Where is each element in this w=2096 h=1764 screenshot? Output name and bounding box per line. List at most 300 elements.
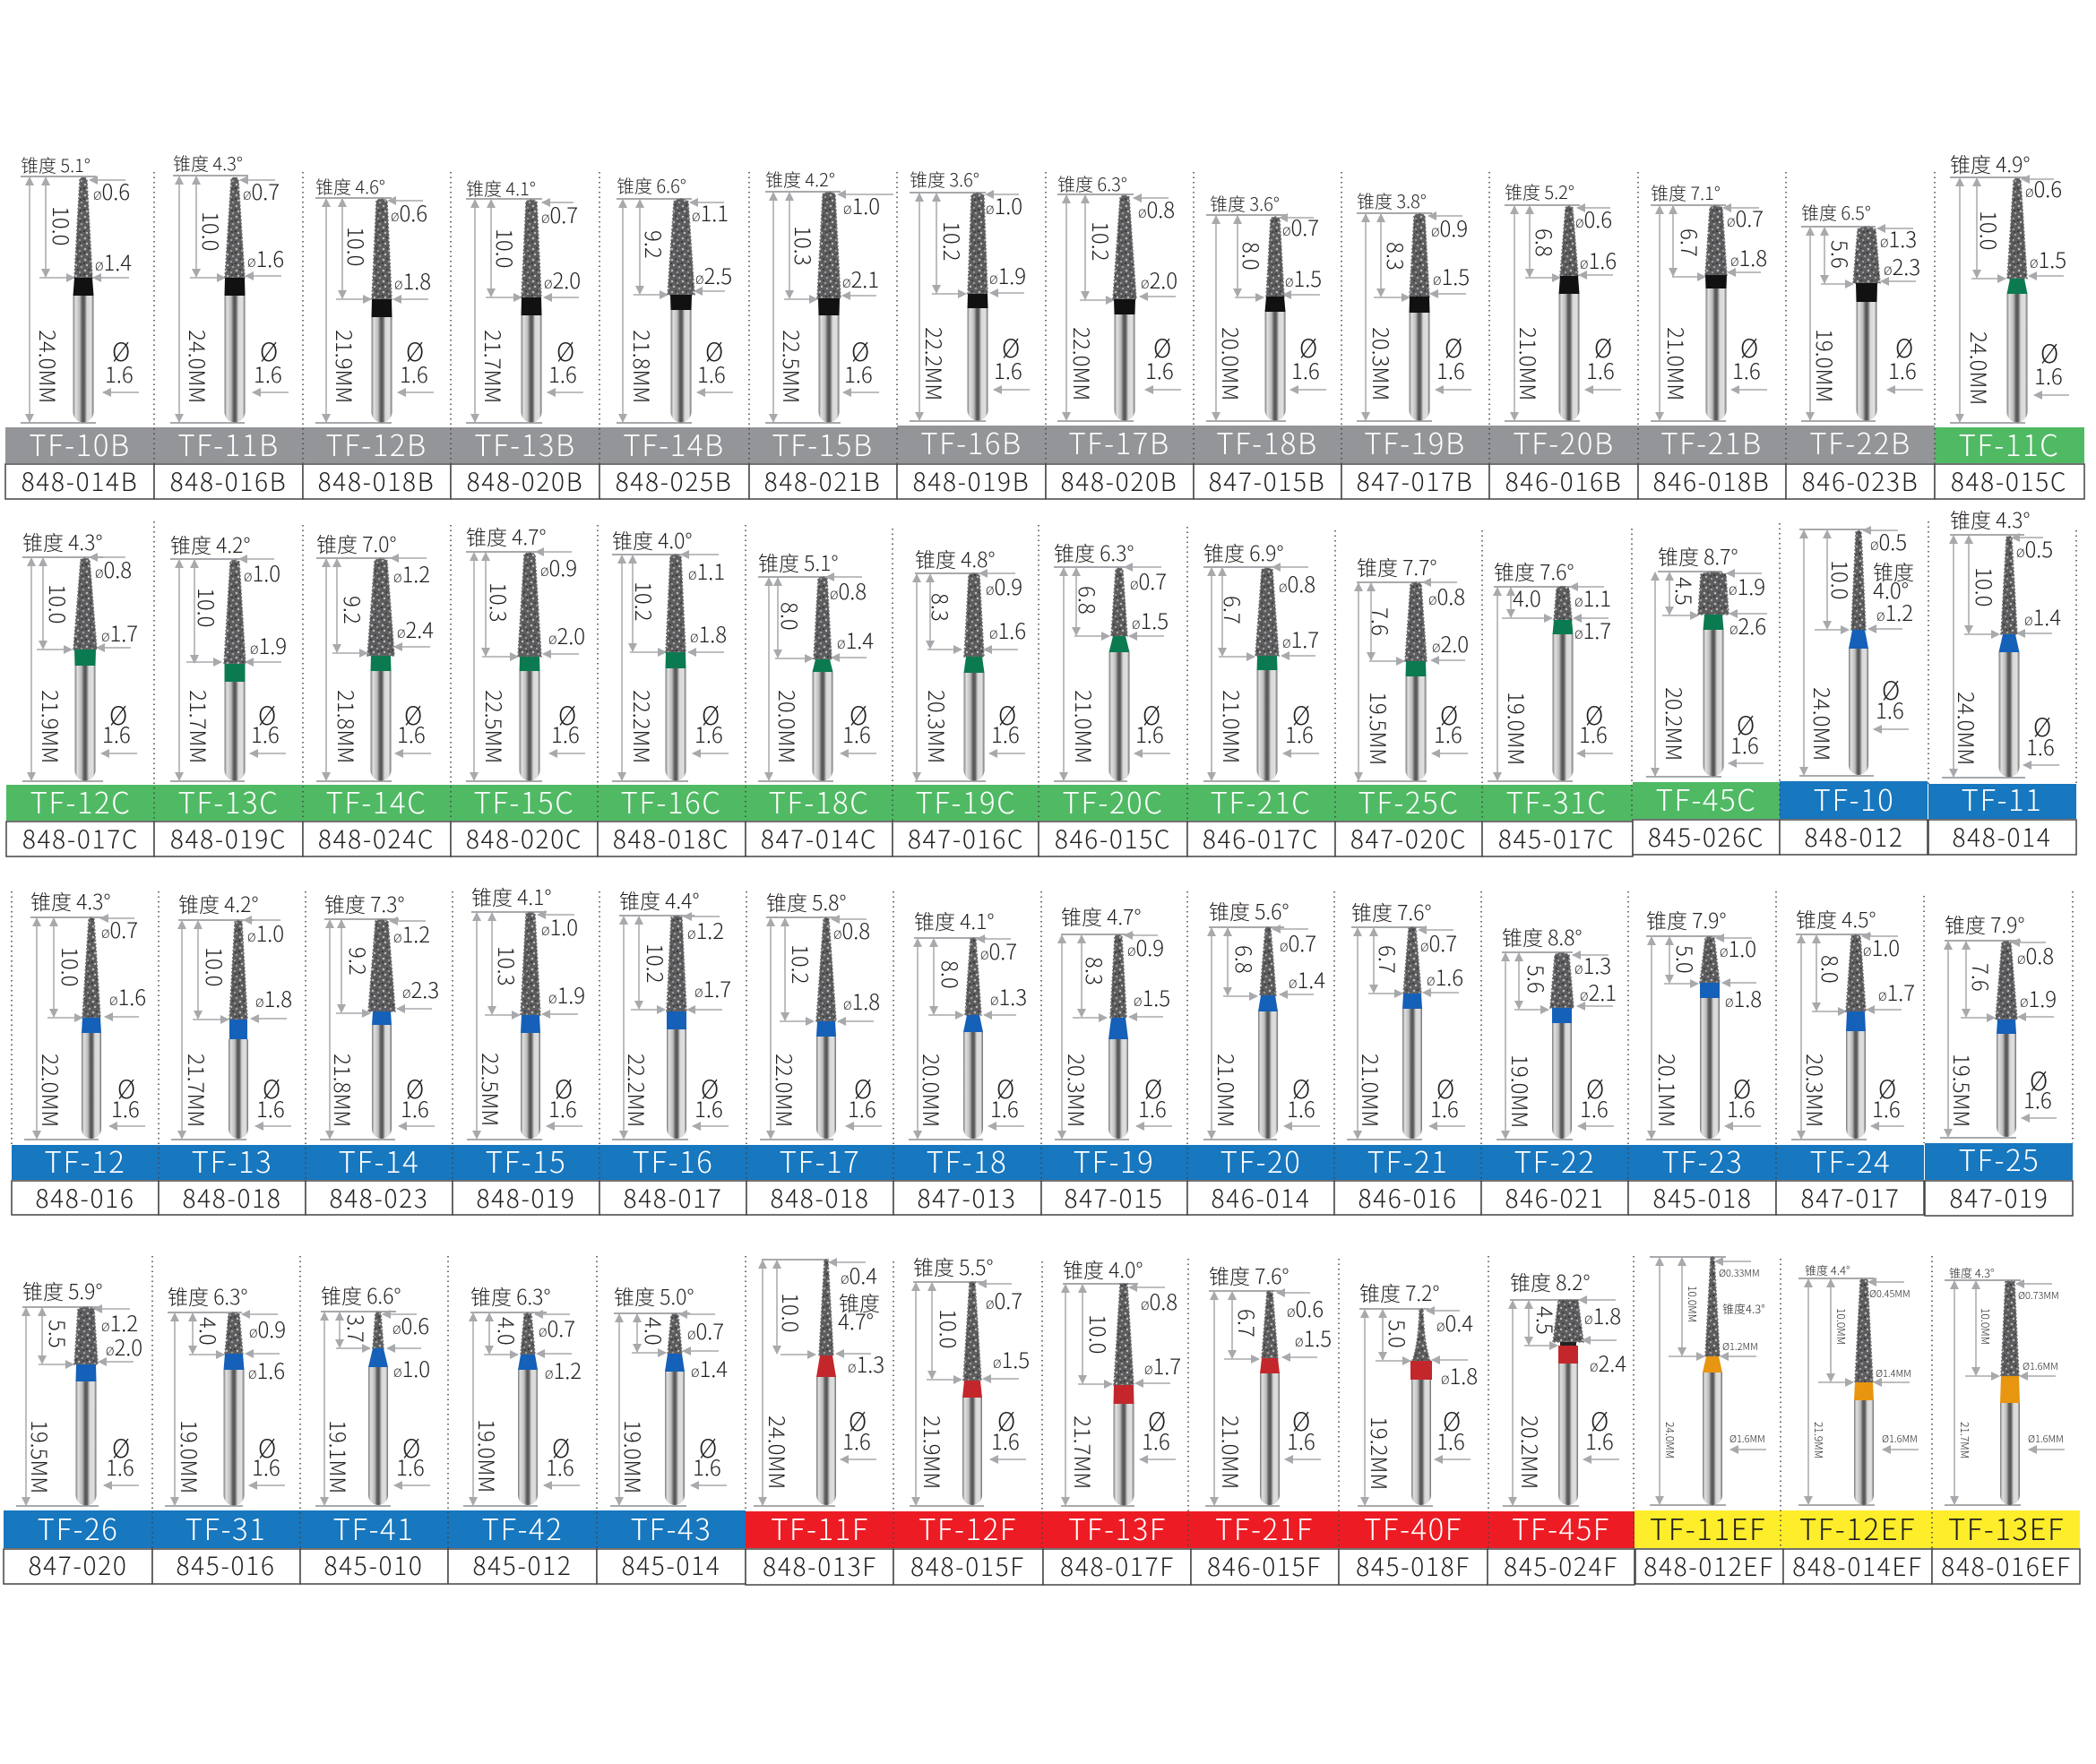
code 845-016: 845-016 (176, 1547, 276, 1583)
bur TF-22B: 1.6 (1888, 354, 1917, 385)
label TF-17B: TF-17B (1068, 420, 1170, 463)
bur TF-21: Ø1.6 (1427, 960, 1463, 992)
bur TF-45F: Ø (1591, 1403, 1609, 1439)
bur TF-11B (170, 150, 289, 423)
label TF-45F (1488, 1506, 1635, 1549)
code 848-018B: 848-018B (318, 463, 435, 499)
bur TF-18: 锥度 4.1° (914, 905, 995, 935)
bur TF-26: 锥度 5.9° (22, 1275, 102, 1305)
bur TF-45F: 4.5 (1531, 1306, 1562, 1335)
bur TF-19: Ø1.5 (1134, 981, 1170, 1012)
bur TF-45C: 20.2MM (1660, 687, 1691, 761)
bur TF-42 (463, 1280, 582, 1506)
bur TF-15C: 22.5MM (479, 690, 511, 763)
bur TF-13EF: Ø1.6MM (2028, 1432, 2064, 1446)
bur TF-31C: Ø1.1 (1574, 581, 1611, 613)
bur TF-15: 22.5MM (476, 1053, 507, 1126)
code 845-012: 845-012 (472, 1547, 573, 1583)
bur TF-45C: Ø2.6 (1729, 609, 1766, 641)
bur TF-25 (1940, 908, 2057, 1138)
bur TF-12: Ø0.7 (101, 913, 138, 944)
label TF-11EF: TF-11EF (1650, 1506, 1766, 1549)
bur TF-16C: Ø (702, 697, 720, 733)
bur TF-22: 1.6 (1580, 1092, 1609, 1123)
bur TF-45F: Ø1.8 (1584, 1299, 1621, 1330)
bur TF-15C: 10.3 (484, 582, 515, 623)
bur TF-45F (1503, 1266, 1626, 1506)
label TF-25C (1335, 779, 1482, 822)
label TF-24: TF-24 (1810, 1139, 1891, 1182)
bur TF-45C: Ø (1737, 707, 1755, 743)
bur TF-20B: 21.0MM (1514, 327, 1545, 400)
bur TF-17: Ø0.8 (833, 914, 870, 945)
code 846-014: 846-014 (1211, 1180, 1311, 1216)
bur TF-11F: Ø (849, 1403, 867, 1439)
bur TF-24: Ø (1878, 1071, 1896, 1106)
bur TF-16: Ø1.7 (694, 972, 731, 1003)
bur TF-40F: Ø1.8 (1441, 1359, 1478, 1390)
bur TF-25C: Ø2.0 (1432, 627, 1469, 658)
code 848-017C: 848-017C (22, 821, 139, 856)
bur TF-16B: 22.2MM (919, 327, 951, 400)
bur TF-41: Ø0.6 (392, 1309, 429, 1340)
bur TF-21F: Ø (1292, 1403, 1310, 1439)
label TF-11B: TF-11B (177, 422, 280, 465)
code 845-018F: 845-018F (1356, 1548, 1471, 1584)
bur TF-16B: 10.2 (937, 221, 969, 262)
bur TF-13F: 10.0 (1083, 1314, 1115, 1355)
bur TF-13: 21.7MM (182, 1054, 213, 1127)
code 848-020B: 848-020B (1061, 463, 1177, 499)
label TF-12C: TF-12C (30, 779, 131, 822)
bur TF-43: 1.6 (693, 1450, 721, 1482)
bur TF-26: 19.5MM (25, 1420, 56, 1493)
code 847-020C: 847-020C (1350, 821, 1467, 856)
bur TF-20B: Ø0.6 (1575, 202, 1612, 234)
bur TF-45F: 20.2MM (1515, 1416, 1547, 1489)
bur TF-11C: 10.0 (1974, 211, 2005, 251)
label TF-13 (159, 1139, 306, 1182)
bur TF-22B: 19.0MM (1810, 329, 1842, 402)
bur TF-13F: 锥度 4.0° (1063, 1253, 1143, 1284)
bur TF-19C: Ø0.9 (986, 570, 1022, 601)
bur TF-31: 19.0MM (175, 1420, 206, 1493)
bur TF-11: 10.0 (1970, 567, 2001, 607)
label TF-31: TF-31 (185, 1506, 266, 1549)
bur TF-21F (1205, 1260, 1332, 1506)
bur TF-11F: Ø1.3 (848, 1347, 884, 1379)
code 845-026C: 845-026C (1648, 819, 1764, 855)
label TF-40F: TF-40F (1364, 1506, 1462, 1549)
bur TF-19C: Ø1.6 (989, 614, 1026, 645)
label TF-11 (1928, 777, 2076, 820)
bur TF-21C: Ø0.8 (1279, 567, 1315, 598)
bur TF-15: 锥度 4.1° (471, 881, 552, 911)
bur TF-23: Ø1.0 (1720, 932, 1756, 963)
code 845-016 (152, 1547, 300, 1584)
label TF-45C: TF-45C (1656, 777, 1756, 820)
label TF-15B: TF-15B (772, 422, 874, 465)
bur TF-20B (1505, 178, 1621, 421)
bur TF-17: 锥度 5.8° (766, 886, 846, 916)
bur TF-20B: Ø1.6 (1580, 244, 1617, 275)
bur TF-15: 1.6 (548, 1092, 577, 1123)
label TF-21C (1187, 779, 1335, 822)
bur TF-13B: Ø (556, 333, 574, 369)
label TF-12B (303, 422, 451, 465)
bur TF-10B: 1.6 (105, 357, 134, 389)
row 4: blue, red and yellow band burs (4, 1251, 2080, 1585)
label TF-11C (1935, 422, 2084, 465)
bur TF-13: 1.6 (256, 1092, 285, 1123)
bur TF-12B: 锥度 4.6° (315, 173, 385, 199)
bur TF-18 (909, 905, 1027, 1140)
bur TF-21F: 21.0MM (1216, 1416, 1247, 1489)
bur TF-12EF: 锥度 4.4° (1805, 1261, 1850, 1278)
bur TF-24 (1791, 903, 1915, 1140)
label TF-15C (451, 779, 598, 822)
code 846-016B: 846-016B (1505, 463, 1622, 499)
bur TF-16 (612, 884, 731, 1140)
code 847-020 (4, 1547, 152, 1584)
bur TF-11B: 1.6 (254, 357, 282, 389)
label TF-14C (303, 779, 451, 822)
label TF-42: TF-42 (482, 1506, 563, 1549)
bur TF-13C: 21.7MM (184, 690, 215, 763)
bur TF-12F: Ø (997, 1403, 1015, 1439)
bur TF-11 (1942, 503, 2061, 778)
bur TF-10: Ø (1882, 672, 1900, 708)
label TF-13C: TF-13C (178, 779, 279, 822)
bur TF-11B: 锥度 4.3° (173, 150, 243, 176)
bur TF-11: 锥度 4.3° (1950, 503, 2031, 534)
bur TF-15C (466, 521, 585, 781)
row 3: blue band burs (12, 881, 2073, 1216)
bur TF-10: 1.6 (1876, 693, 1904, 725)
bur TF-19C (915, 543, 1026, 781)
bur TF-31C: Ø (1585, 697, 1603, 733)
bur TF-19C: 20.3MM (922, 690, 953, 763)
bur TF-19C: 锥度 4.8° (915, 543, 995, 573)
bur TF-19B: 8.3 (1381, 242, 1412, 271)
bur TF-20: Ø0.7 (1280, 926, 1316, 958)
label TF-13B: TF-13B (474, 422, 576, 465)
bur TF-12EF: Ø1.4MM (1876, 1366, 1911, 1381)
label TF-17: TF-17 (780, 1139, 860, 1182)
bur TF-10: 锥度 (1873, 555, 1914, 586)
bur TF-45C: 4.5 (1669, 577, 1701, 606)
bur TF-16B: Ø1.9 (989, 259, 1026, 290)
code 848-018: 848-018 (770, 1180, 870, 1216)
bur TF-45C: 1.6 (1730, 728, 1759, 760)
label TF-11F (746, 1506, 893, 1549)
bur TF-13C: 10.0 (192, 588, 223, 628)
code 848-020B: 848-020B (467, 463, 583, 499)
label TF-20B: TF-20B (1513, 420, 1615, 463)
bur TF-19: 8.3 (1080, 957, 1111, 985)
bur TF-13B: 1.6 (548, 357, 577, 389)
bur TF-17B: Ø2.0 (1141, 263, 1177, 295)
bur TF-11EF: Ø1.2MM (1722, 1339, 1758, 1354)
code 846-017C: 846-017C (1203, 821, 1319, 856)
bur TF-19B: Ø0.9 (1431, 211, 1468, 243)
bur TF-21C (1203, 537, 1319, 781)
label TF-18 (893, 1139, 1041, 1182)
bur TF-11F: 锥度 (839, 1286, 880, 1317)
bur TF-21: Ø0.7 (1420, 926, 1457, 958)
bur TF-21: 6.7 (1373, 945, 1404, 974)
bur TF-20C: Ø (1143, 697, 1160, 733)
code 848-019C: 848-019C (170, 821, 287, 856)
label TF-31 (152, 1506, 300, 1549)
label TF-21F (1189, 1506, 1339, 1549)
bur TF-13B: 锥度 4.1° (466, 175, 536, 201)
bur TF-19: Ø (1144, 1071, 1162, 1106)
bur TF-12C: 锥度 4.3° (22, 526, 102, 556)
label TF-13C (154, 779, 303, 822)
bur TF-19B: 锥度 3.8° (1357, 187, 1427, 213)
code 848-014 (1928, 819, 2076, 855)
code 847-019: 847-019 (1949, 1180, 2049, 1216)
label TF-19B: TF-19B (1364, 420, 1466, 463)
code 848-019 (453, 1180, 599, 1216)
code 845-017C: 845-017C (1498, 821, 1615, 856)
label TF-11B (154, 422, 303, 465)
bur TF-43: Ø (699, 1430, 717, 1466)
bur TF-20C: Ø0.7 (1130, 564, 1167, 596)
code 848-017: 848-017 (623, 1180, 723, 1216)
bur TF-45F: 锥度 8.2° (1510, 1266, 1590, 1296)
bur TF-22B: Ø2.3 (1884, 250, 1920, 281)
bur TF-12B: Ø1.8 (394, 264, 431, 296)
bur TF-22B (1801, 199, 1923, 421)
label TF-20C: TF-20C (1063, 779, 1163, 822)
bur TF-13EF: Ø1.6MM (2023, 1359, 2058, 1373)
label TF-14: TF-14 (339, 1139, 419, 1182)
bur TF-18C: 8.0 (775, 602, 806, 631)
bur TF-17B: 1.6 (1145, 354, 1174, 385)
bur TF-19B: Ø1.5 (1433, 260, 1470, 291)
bur TF-14B: Ø1.1 (692, 196, 729, 228)
row 2: green band and blue band burs (6, 503, 2076, 856)
bur TF-24: 1.6 (1872, 1092, 1901, 1123)
bur TF-17B: Ø0.8 (1138, 193, 1175, 224)
label TF-18B (1194, 420, 1341, 463)
bur TF-18: Ø1.3 (990, 980, 1027, 1011)
bur TF-16C: 锥度 4.0° (612, 524, 692, 555)
label TF-18B: TF-18B (1216, 420, 1318, 463)
bur TF-23 (1646, 904, 1762, 1140)
label TF-16B: TF-16B (920, 420, 1022, 463)
bur TF-45C (1646, 540, 1767, 777)
bur TF-14C: Ø2.4 (397, 613, 434, 644)
label TF-41 (300, 1506, 448, 1549)
bur TF-12C: 21.9MM (36, 690, 67, 763)
label TF-10: TF-10 (1814, 777, 1894, 820)
bur TF-26: 1.6 (106, 1450, 134, 1482)
bur TF-23: 20.1MM (1652, 1054, 1684, 1127)
bur TF-14C: 1.6 (397, 718, 426, 749)
bur TF-13C: Ø (258, 697, 276, 733)
bur TF-14: Ø1.2 (393, 917, 430, 949)
bur TF-25C: 1.6 (1434, 718, 1462, 749)
bur TF-13: 锥度 4.2° (178, 888, 258, 918)
bur TF-13C: 1.6 (251, 718, 280, 749)
bur TF-11F: 24.0MM (763, 1416, 794, 1489)
bur TF-19: 锥度 4.7° (1061, 900, 1142, 931)
bur TF-21 (1347, 896, 1465, 1140)
bur TF-12 (24, 885, 146, 1140)
bur TF-17: 22.0MM (770, 1054, 801, 1127)
code 848-018C: 848-018C (613, 821, 729, 856)
bur TF-12C: Ø0.8 (95, 553, 132, 584)
bur TF-25C: 19.5MM (1364, 692, 1395, 765)
bur TF-11EF: 锥度4.3° (1722, 1300, 1765, 1317)
code 848-018 (746, 1180, 893, 1216)
label TF-12B: TF-12B (325, 422, 427, 465)
bur TF-25: 1.6 (2023, 1083, 2052, 1114)
label TF-10 (1780, 777, 1928, 820)
bur TF-13EF: Ø0.73MM (2018, 1288, 2059, 1303)
bur TF-23: Ø1.8 (1725, 982, 1762, 1013)
bur TF-31: Ø (258, 1430, 276, 1466)
bur TF-22: Ø (1586, 1071, 1604, 1106)
label TF-40F (1339, 1506, 1488, 1549)
bur TF-20B: Ø (1594, 330, 1612, 366)
code 848-016B: 848-016B (170, 463, 287, 499)
bur TF-11C: 1.6 (2034, 359, 2063, 391)
bur TF-12EF: Ø1.6MM (1882, 1432, 1918, 1446)
bur TF-13B: 21.7MM (479, 330, 510, 403)
code 847-019 (1925, 1180, 2073, 1216)
code 846-014 (1187, 1180, 1334, 1216)
label TF-26 (4, 1506, 152, 1549)
bur TF-14B: 21.8MM (627, 330, 659, 403)
bur TF-17: Ø (854, 1071, 872, 1106)
bur TF-14B: 锥度 6.6° (617, 172, 686, 198)
bur TF-10B: 24.0MM (33, 330, 65, 403)
bur TF-21F: 6.7 (1232, 1309, 1264, 1338)
label TF-16C: TF-16C (621, 779, 721, 822)
bur TF-21C: 21.0MM (1217, 690, 1248, 763)
bur TF-11EF: 24.0MM (1662, 1422, 1678, 1459)
bur TF-11C: 锥度 4.9° (1950, 148, 2031, 178)
bur TF-43: 19.0MM (618, 1420, 650, 1493)
bur TF-26: Ø2.0 (106, 1330, 142, 1362)
label TF-45F: TF-45F (1512, 1506, 1610, 1549)
bur TF-18C: Ø (850, 697, 867, 733)
label TF-43: TF-43 (631, 1506, 712, 1549)
bur TF-45C: 锥度 8.7° (1658, 540, 1738, 571)
label TF-20B (1489, 420, 1638, 463)
bur TF-31: Ø0.9 (249, 1312, 286, 1344)
code 848-021B: 848-021B (764, 463, 881, 499)
bur TF-22: 锥度 8.8° (1502, 921, 1583, 951)
bur TF-20: 6.8 (1229, 945, 1261, 974)
code 848-012 (1780, 819, 1928, 855)
bur TF-15B (765, 166, 893, 423)
bur TF-10B: Ø0.6 (93, 175, 130, 206)
bur TF-15B: Ø1.0 (843, 189, 880, 220)
bur TF-43: 4.0 (639, 1317, 670, 1346)
code 846-018B: 846-018B (1653, 463, 1770, 499)
code 848-020C: 848-020C (466, 821, 582, 856)
label TF-18: TF-18 (927, 1139, 1007, 1182)
bur TF-18: Ø (996, 1071, 1014, 1106)
bur TF-20 (1203, 895, 1325, 1140)
label TF-25C: TF-25C (1359, 779, 1459, 822)
bur TF-18C: 1.6 (842, 718, 871, 749)
bur TF-18B (1206, 190, 1326, 421)
bur TF-12: 10.0 (56, 947, 87, 987)
bur TF-19B (1357, 187, 1471, 421)
label TF-12F: TF-12F (919, 1506, 1017, 1549)
bur TF-16: 1.6 (694, 1092, 723, 1123)
label TF-16 (599, 1139, 746, 1182)
bur TF-17: Ø1.8 (843, 985, 880, 1016)
code 846-015C: 846-015C (1055, 821, 1171, 856)
bur TF-20: 1.6 (1287, 1092, 1315, 1123)
code 848-017 (599, 1180, 746, 1216)
bur TF-21C: 锥度 6.9° (1203, 537, 1283, 567)
bur TF-43: Ø0.7 (687, 1314, 724, 1346)
bur TF-22B: 5.6 (1825, 240, 1857, 269)
bur TF-31C: 1.6 (1579, 718, 1608, 749)
bur TF-17: 1.6 (848, 1092, 876, 1123)
bur TF-11F: 10.0 (776, 1293, 807, 1333)
bur TF-14C (316, 528, 434, 781)
code 847-017 (1776, 1180, 1924, 1216)
bur TF-40F: 19.2MM (1365, 1416, 1396, 1490)
bur TF-22: Ø2.1 (1580, 976, 1617, 1007)
label TF-18C: TF-18C (769, 779, 869, 822)
bur TF-17: 10.2 (786, 944, 817, 985)
label TF-16C (598, 779, 746, 822)
bur TF-11: Ø0.5 (2016, 532, 2053, 564)
bur TF-42: 19.0MM (472, 1419, 504, 1493)
bur TF-16: 10.2 (641, 943, 672, 984)
code 845-014: 845-014 (621, 1547, 721, 1583)
label TF-21F: TF-21F (1215, 1506, 1314, 1549)
bur TF-11B: Ø (260, 333, 278, 369)
bur TF-14: Ø2.3 (402, 973, 439, 1004)
code 847-013 (893, 1180, 1041, 1216)
bur TF-41: 3.7 (341, 1314, 373, 1343)
code 846-015F: 846-015F (1207, 1548, 1322, 1584)
code 847-015 (1041, 1180, 1187, 1216)
bur TF-25: Ø0.8 (2017, 939, 2054, 970)
bur TF-11EF (1650, 1257, 1766, 1505)
bur TF-23: 5.0 (1670, 945, 1702, 974)
label TF-12: TF-12 (45, 1139, 125, 1182)
label TF-14C: TF-14C (326, 779, 427, 822)
bur TF-22B: Ø (1895, 330, 1913, 366)
bur TF-14B: 9.2 (639, 230, 670, 259)
label TF-17 (746, 1139, 893, 1182)
code 845-010 (300, 1547, 448, 1584)
bur TF-15C: 1.6 (551, 718, 580, 749)
label TF-19C (893, 779, 1039, 822)
bur TF-26 (16, 1275, 142, 1506)
bur TF-16C: 1.6 (694, 718, 723, 749)
bur TF-13EF: 10.0MM (1978, 1308, 1993, 1345)
code 848-016 (12, 1180, 159, 1216)
bur TF-19 (1055, 900, 1172, 1140)
bur TF-21C: Ø1.7 (1282, 623, 1319, 654)
bur TF-21: 1.6 (1430, 1092, 1459, 1123)
bur TF-14C: Ø1.2 (393, 557, 430, 589)
label TF-43 (597, 1506, 746, 1549)
